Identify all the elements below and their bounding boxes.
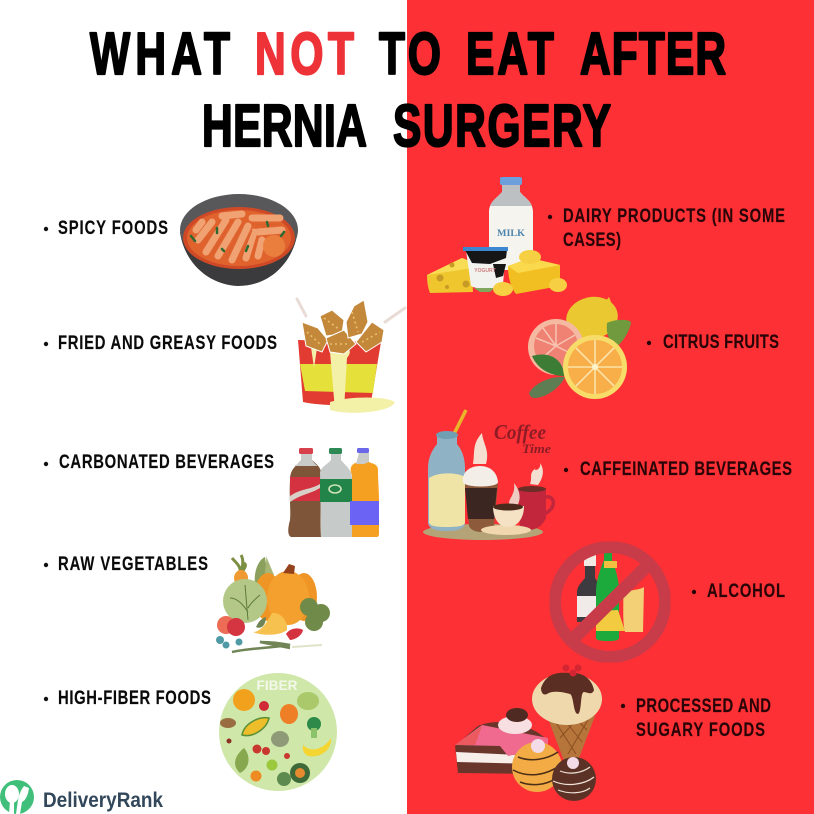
icon: raw vegetables pile — [216, 555, 330, 652]
list item: citrus fruits: CITRUS FRUITS — [663, 331, 779, 352]
icon: citrus fruits — [528, 292, 631, 399]
title — [90, 20, 726, 159]
logo: DeliveryRank: DeliveryRank — [43, 788, 163, 812]
list item: processed and sugary foods — [621, 695, 771, 740]
title: TO — [379, 20, 441, 87]
list item: processed and sugary foods: PROCESSED AND — [636, 695, 771, 716]
icon: coffee time drinks — [423, 410, 553, 540]
icon: fried chicken bucket — [297, 299, 405, 413]
lime bottle — [320, 448, 352, 537]
icon: dairy products: MILK — [497, 229, 526, 239]
title: WHAT — [90, 20, 230, 87]
list item: alcohol: ALCOHOL — [707, 580, 785, 601]
icon: dairy products: YOGURT — [474, 268, 496, 274]
icon: fiber foods plate: FIBER — [256, 678, 298, 693]
orange bottle — [350, 448, 379, 537]
title: HERNIA — [202, 92, 367, 159]
list item: dairy products — [548, 205, 785, 250]
title: SURGERY — [393, 92, 611, 159]
icon: soda bottles — [288, 448, 379, 537]
title: NOT — [255, 20, 354, 87]
list item: carbonated beverages: CARBONATED BEVERAGES — [59, 451, 274, 472]
list item: processed and sugary foods: SUGARY FOODS — [636, 719, 765, 740]
icon: coffee time drinks: Time — [522, 441, 551, 456]
title: AFTER — [580, 20, 726, 87]
list item: dairy products: CASES) — [563, 229, 621, 250]
icon: desserts — [455, 664, 602, 801]
list item: spicy foods: SPICY FOODS — [58, 217, 168, 238]
title: EAT — [466, 20, 554, 87]
list item: fried and greasy foods: FRIED AND GREASY FOODS — [58, 332, 277, 353]
panel: red right half — [407, 0, 814, 814]
list item: caffeinated beverages: CAFFEINATED BEVERAGES — [580, 458, 792, 479]
icon: coffee time drinks: Coffee — [494, 420, 546, 444]
list item: dairy products: DAIRY PRODUCTS (IN SOME — [563, 205, 785, 226]
list item: raw vegetables: RAW VEGETABLES — [58, 553, 208, 574]
list item: high-fiber foods: HIGH-FIBER FOODS — [58, 687, 211, 708]
icon: bowl of spicy noodles — [180, 194, 298, 286]
icon: no alcohol sign — [555, 547, 665, 657]
icon: dairy products — [427, 177, 567, 296]
panel: white left half — [0, 0, 407, 814]
icon: fiber foods plate — [219, 673, 337, 791]
logo: DeliveryRank — [0, 780, 163, 814]
cola bottle — [288, 448, 321, 537]
